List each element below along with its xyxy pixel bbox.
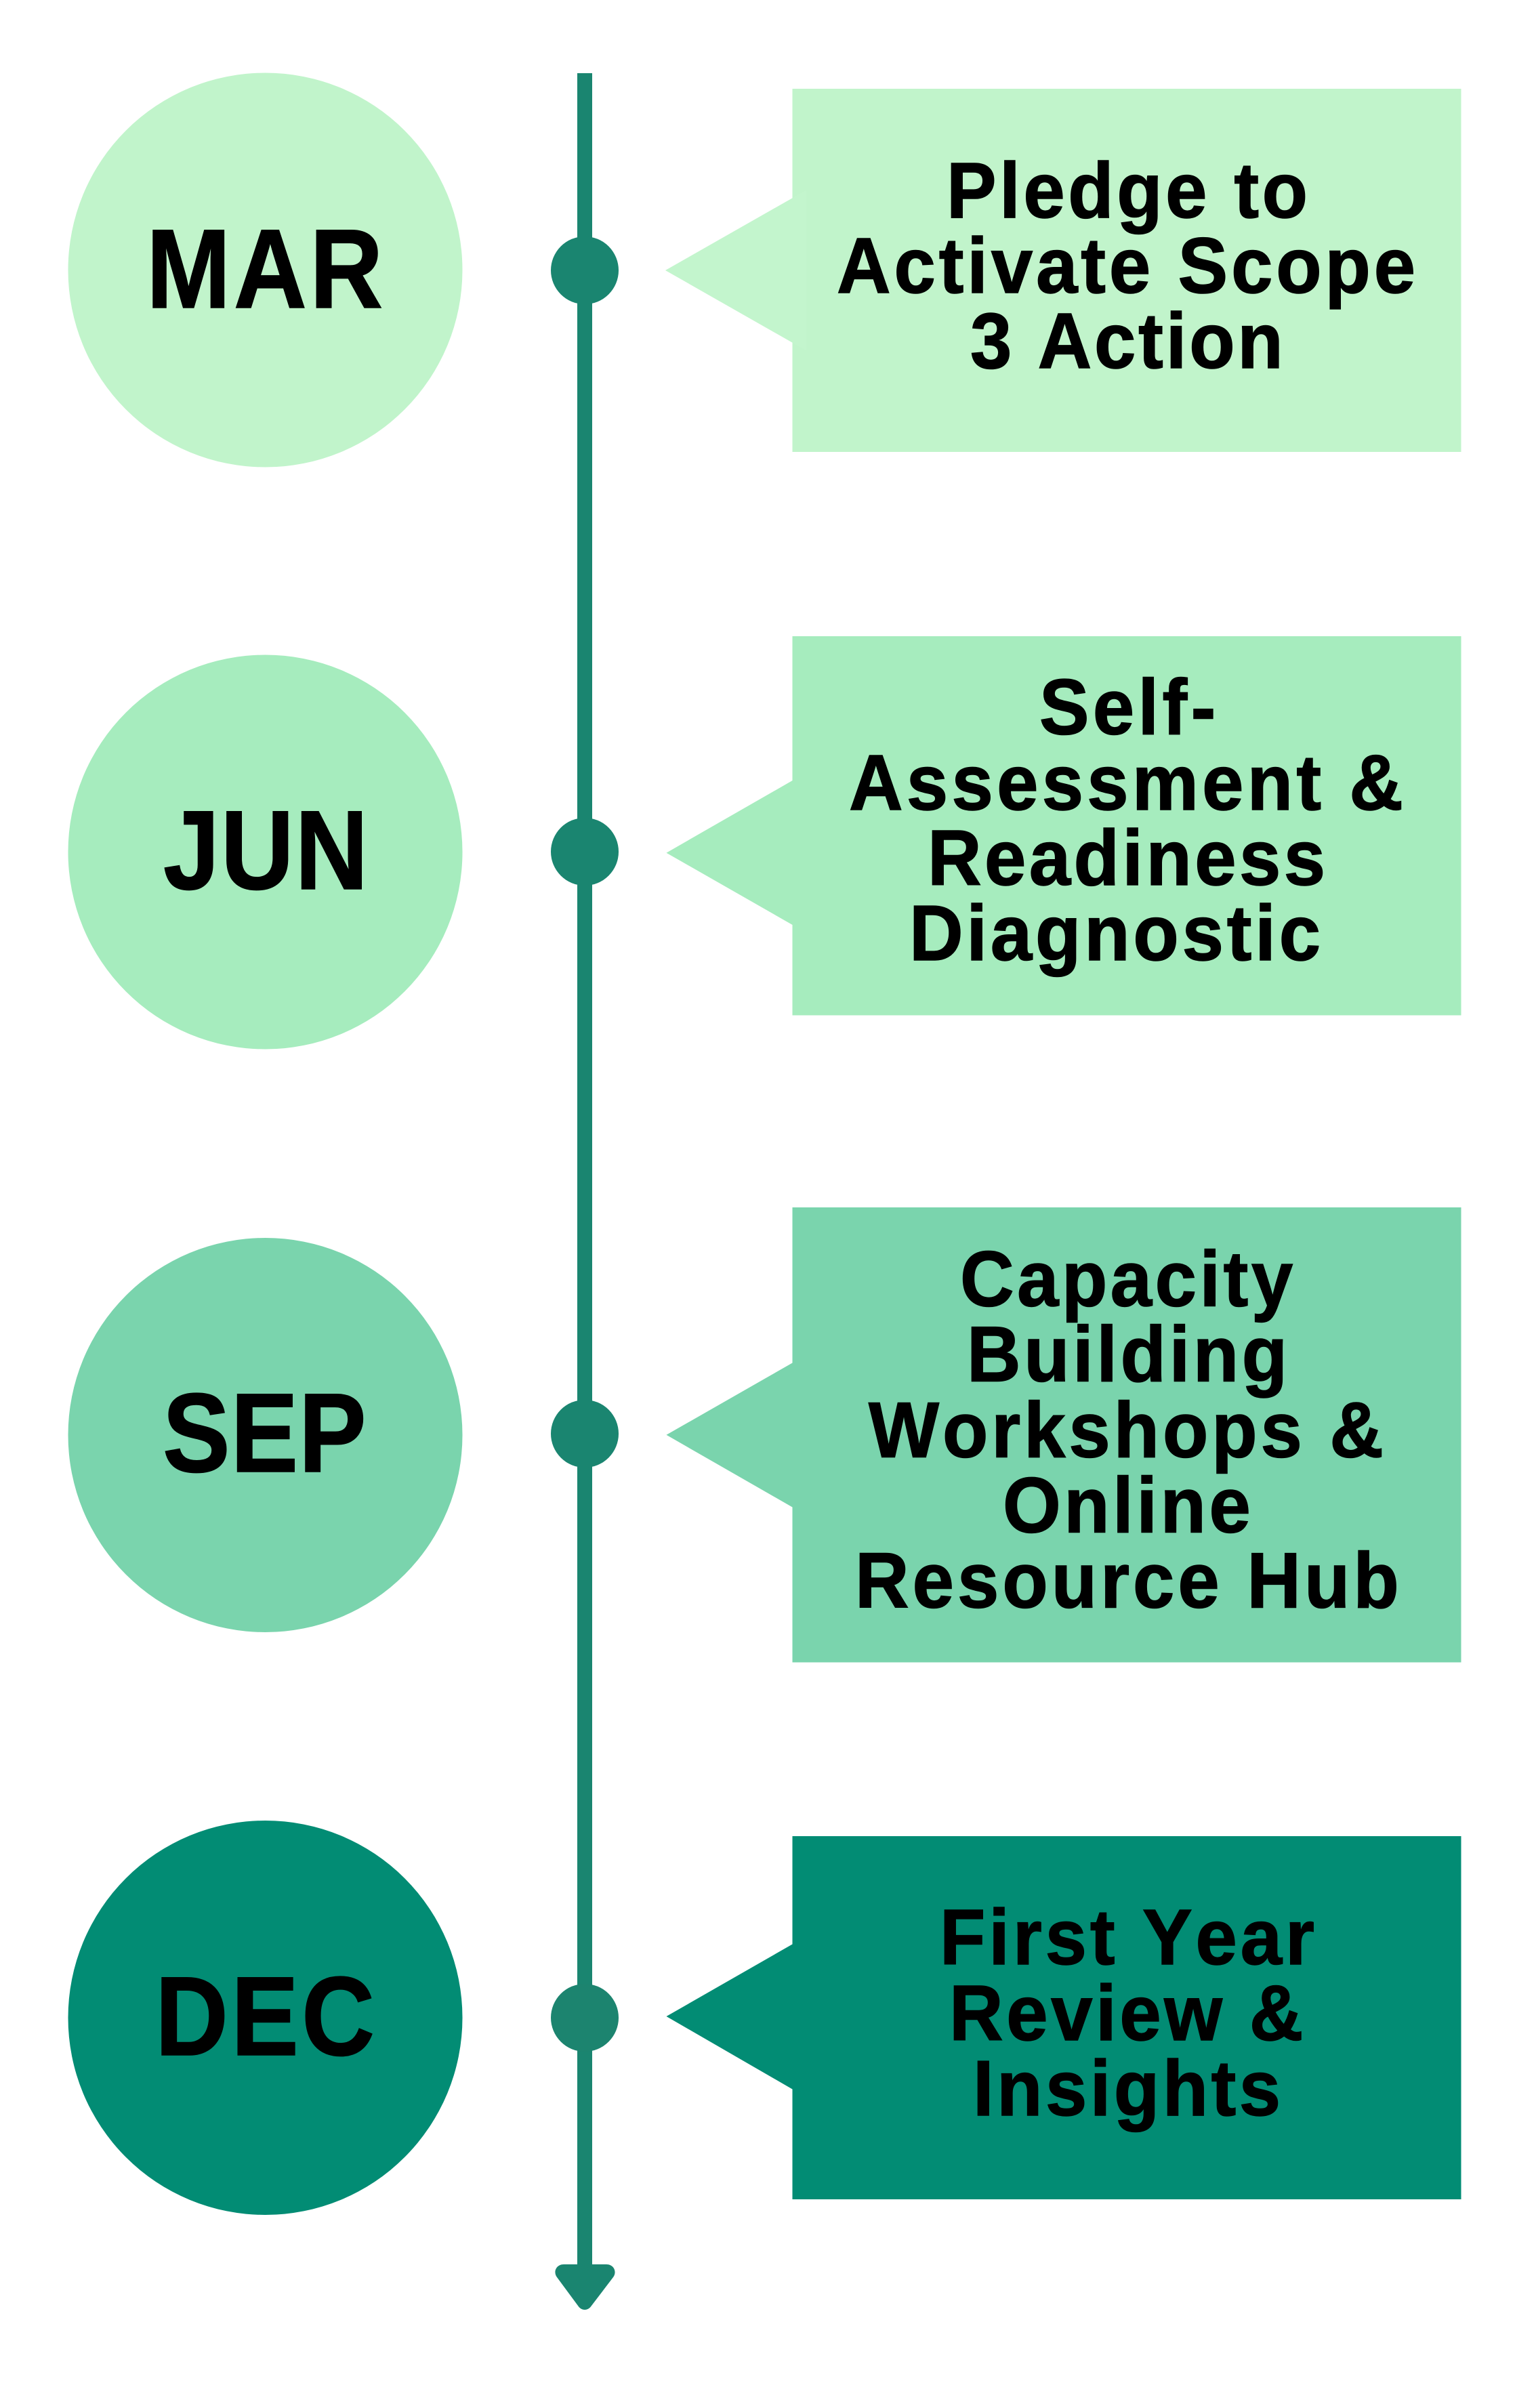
timeline axis with arrow [555,73,615,2310]
callout text: Review & [949,1969,1304,2057]
callout text [849,663,1403,977]
callout pointer [665,190,806,350]
timeline marker [551,1984,619,2052]
callout text [855,1235,1399,1624]
callout text: Insights [973,2044,1281,2132]
month label: DEC: DEC [155,1954,375,2079]
callout text: Diagnostic [909,889,1321,977]
callout text: Activate Scope [837,222,1415,310]
callout text: Online [1003,1461,1251,1549]
callout text: First Year [940,1893,1314,1981]
panel: September [68,1207,1461,1663]
month circle: SEP [68,1238,462,1632]
callout text [940,1893,1314,2132]
callout text: Resource Hub [855,1537,1399,1624]
callout text: Self- [1039,663,1216,751]
month circle: JUN [68,655,462,1049]
month label: MAR: MAR [146,207,383,332]
panel: December [68,1821,1461,2215]
callout box [793,89,1461,452]
callout text: Pledge to [947,146,1308,234]
callout box [667,636,1461,1015]
month label: SEP: SEP [163,1371,367,1496]
callout text: Workshops & [869,1386,1384,1474]
callout text [837,146,1415,385]
callout box [667,1836,1461,2199]
panel: March [68,73,1461,468]
callout text: Capacity [960,1235,1293,1323]
icon: arrow head [555,2264,615,2310]
month circle: DEC [68,1821,462,2215]
month label: JUN: JUN [163,788,368,913]
callout text: Readiness [928,814,1325,901]
callout text: Building [967,1310,1287,1398]
month circle: MAR [68,73,462,468]
panel: June [68,636,1461,1049]
timeline marker [551,818,619,886]
callout box [667,1207,1461,1663]
timeline marker [551,236,619,304]
callout text: Assessment & [849,739,1403,826]
timeline marker [551,1400,619,1468]
callout text: 3 Action [970,297,1283,385]
